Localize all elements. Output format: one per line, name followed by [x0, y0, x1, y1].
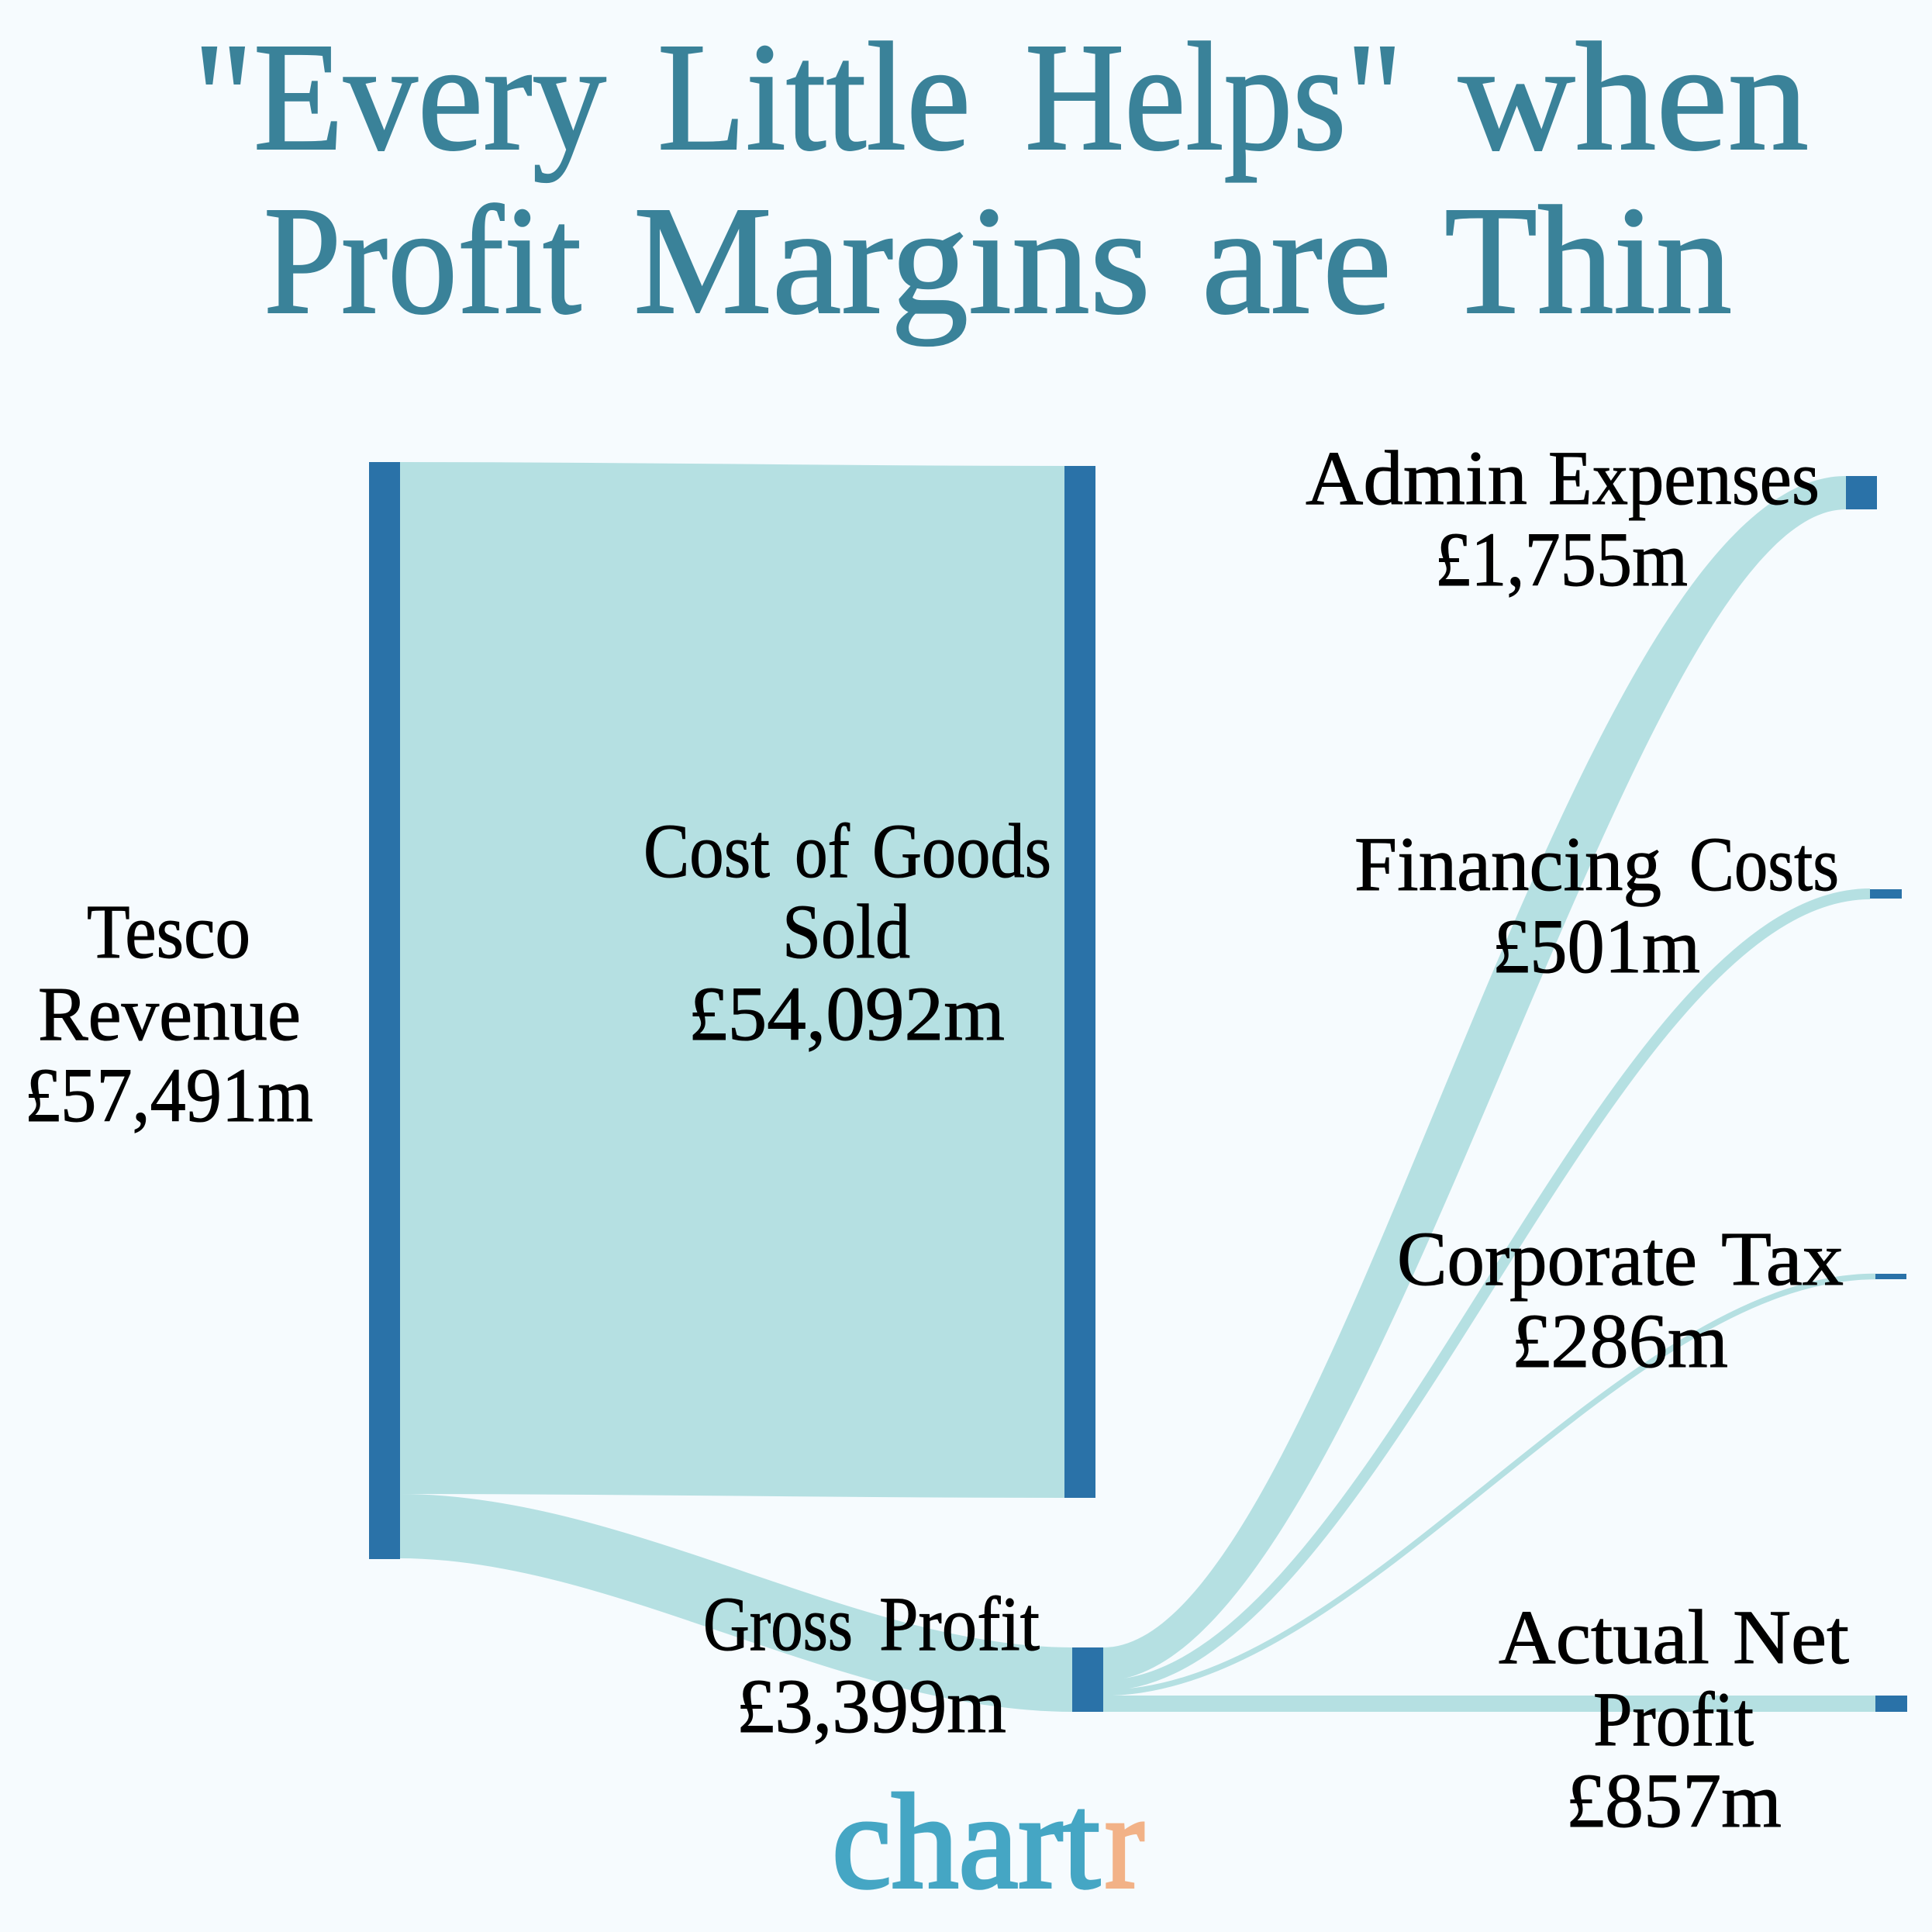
label: actual net profit: Profit: [1593, 1676, 1754, 1762]
title: Thin: [1444, 175, 1732, 347]
label: corporate tax: [1397, 1216, 1844, 1384]
link: gross profit to net profit: [1103, 1696, 1875, 1712]
label: actual net profit: Net: [1733, 1594, 1849, 1680]
label: actual net profit: £857m: [1566, 1758, 1782, 1844]
logo: chartr: chart: [832, 1766, 1100, 1916]
label: admin expenses: Expenses: [1548, 435, 1820, 521]
title: when: [1458, 12, 1809, 183]
label: corporate tax: Tax: [1721, 1216, 1844, 1302]
link: revenue to cost of goods sold: [400, 462, 1064, 1498]
link: revenue to gross profit: [400, 1526, 1072, 1679]
title: Little: [657, 12, 971, 183]
label: corporate tax: £286m: [1512, 1298, 1728, 1384]
title: Profit: [264, 175, 581, 347]
label: gross profit: Gross: [703, 1581, 853, 1667]
node: financing costs: [1870, 889, 1902, 899]
label: cost of goods sold: Goods: [872, 808, 1051, 894]
label: tesco revenue: Revenue: [38, 971, 301, 1057]
node: revenue: [369, 462, 400, 1559]
link: gross profit to financing costs: [1103, 894, 1870, 1685]
link: gross profit to admin expenses: [1103, 476, 1846, 1681]
label: financing costs: [1354, 821, 1839, 989]
label: financing costs: Costs: [1689, 821, 1839, 907]
label: admin expenses: Admin: [1306, 435, 1527, 521]
label: admin expenses: £1,755m: [1435, 516, 1688, 602]
title: are: [1202, 175, 1392, 347]
label: gross profit: [703, 1581, 1040, 1749]
link: gross profit to corporate tax: [1103, 1276, 1875, 1693]
label: tesco revenue: [25, 888, 313, 1138]
label: actual net profit: [1499, 1594, 1849, 1844]
label: financing costs: Financing: [1354, 821, 1661, 907]
label: cost of goods sold: Cost: [643, 808, 770, 894]
title: "Every: [193, 12, 606, 183]
node: net profit: [1875, 1696, 1907, 1712]
label: actual net profit: Actual: [1499, 1594, 1709, 1680]
label: corporate tax: Corporate: [1397, 1216, 1697, 1302]
label: financing costs: £501m: [1492, 903, 1700, 989]
label: gross profit: £3,399m: [737, 1663, 1006, 1749]
logo: chartr: r: [1105, 1766, 1144, 1916]
label: tesco revenue: Tesco: [87, 888, 250, 975]
label: tesco revenue: £57,491m: [25, 1052, 313, 1138]
label: gross profit: Profit: [879, 1581, 1040, 1667]
sankey chart: [369, 462, 1907, 1712]
label: cost of goods sold: of: [795, 808, 850, 894]
label: admin expenses: [1306, 435, 1820, 602]
label: cost of goods sold: [643, 808, 1051, 1057]
node: gross profit: [1072, 1647, 1103, 1712]
title: Helps": [1025, 12, 1402, 183]
node: admin expenses: [1846, 476, 1877, 509]
title: Margins: [633, 175, 1151, 347]
label: cost of goods sold: £54,092m: [688, 971, 1005, 1057]
node: corporate tax: [1875, 1274, 1906, 1279]
title: [193, 12, 1809, 347]
node: cost of goods sold: [1064, 466, 1095, 1498]
label: cost of goods sold: Sold: [782, 888, 910, 975]
